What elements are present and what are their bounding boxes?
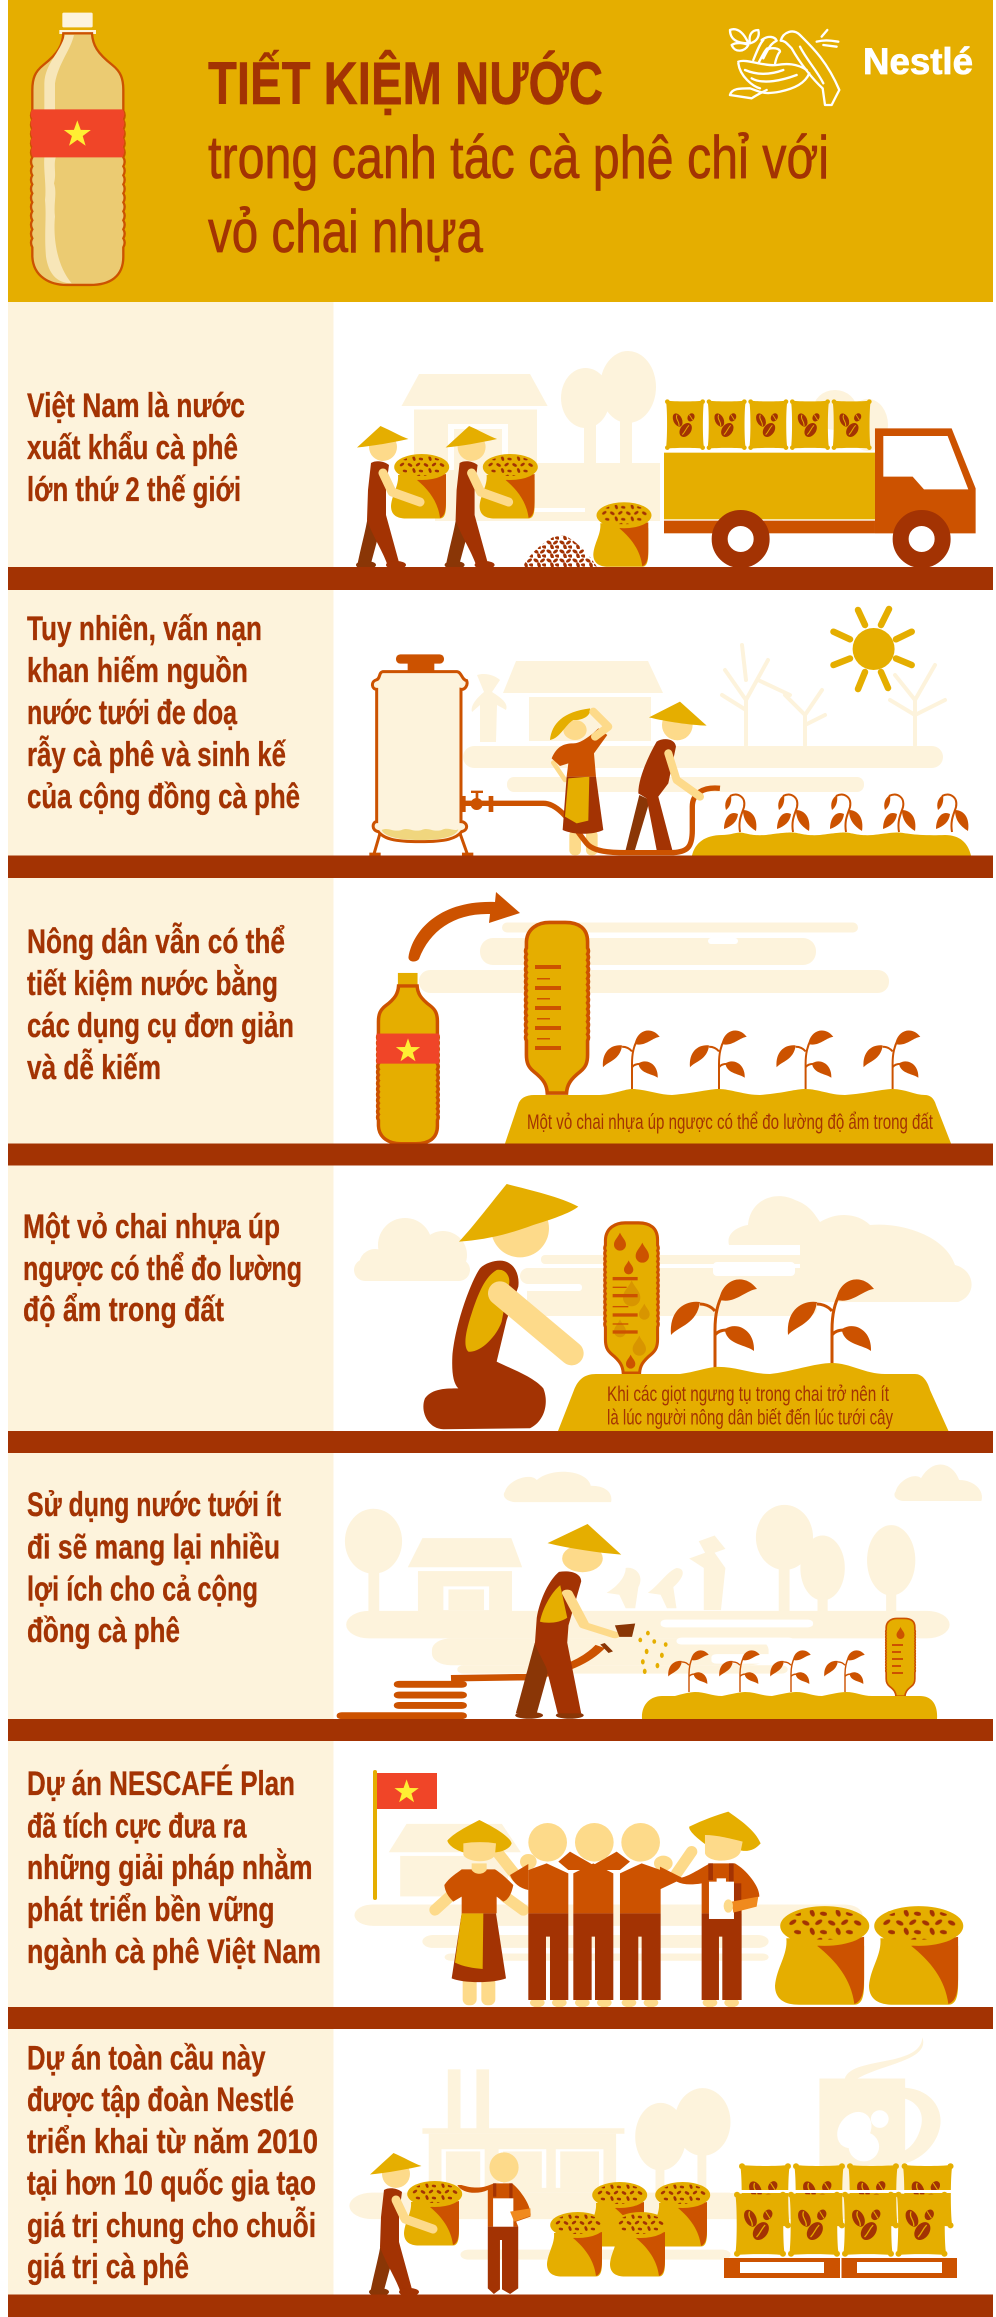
caption: when droplets fade: là lúc người nông dân biết đến lúc tưới cây — [607, 1406, 893, 1430]
text: section 5: lợi ích cho cả cộng — [27, 1570, 258, 1608]
text: section 5: đồng cà phê — [27, 1612, 180, 1650]
icon: sack 1 — [775, 1906, 869, 2005]
farmer carrying sack 2 — [445, 426, 538, 569]
background bars — [419, 922, 889, 993]
text: section 2: rẫy cà phê và sinh kế — [27, 736, 286, 774]
pallets with sacks — [724, 2163, 957, 2278]
panel: section 3, plastic bottle tool — [27, 892, 951, 1144]
text: section 5 — [27, 1486, 281, 1650]
farmer carrying sack — [369, 2153, 462, 2296]
mound with plants and bottle — [642, 1618, 937, 1719]
band 1 — [8, 567, 993, 590]
farmer — [515, 1524, 635, 1719]
text: section 7: tại hơn 10 quốc gia tạo — [27, 2164, 316, 2202]
farmer holding the hose — [626, 702, 707, 850]
panel: section 7, global project — [27, 2037, 957, 2296]
group of farmers and staff — [435, 1812, 761, 2007]
mound with plants — [505, 1030, 951, 1144]
icon: upright bottle — [377, 973, 439, 1144]
farmer carrying sack 1 — [356, 426, 449, 569]
text: section 7: Dự án toàn cầu này — [27, 2040, 266, 2078]
kneeling farmer — [423, 1184, 578, 1429]
band 4 — [8, 1431, 993, 1453]
text: section 6 — [27, 1765, 321, 1971]
text: section 1: Việt Nam là nước — [27, 387, 245, 425]
title: trong canh tác cà phê chỉ với — [208, 124, 829, 191]
icon: empty water tank and hose — [369, 654, 720, 856]
header panel — [8, 0, 993, 302]
Nestlé wordmark: Nestlé — [863, 41, 973, 82]
dry plants on mound — [692, 795, 971, 856]
band 6 — [8, 2007, 993, 2029]
band 3 — [8, 1144, 993, 1166]
text: section 4: độ ẩm trong đất — [23, 1291, 224, 1329]
text: section 2: nước tưới đe doạ — [27, 694, 238, 732]
truck with coffee sacks — [664, 399, 976, 560]
text: section 7: giá trị cà phê — [27, 2248, 189, 2286]
panel: section 1, coffee export — [27, 351, 976, 569]
right illustration column background — [334, 302, 993, 2317]
caption: when droplets fade — [607, 1383, 893, 1430]
text: section 7 — [27, 2040, 318, 2286]
text: section 5: đi sẽ mang lại nhiều — [27, 1528, 280, 1566]
text: section 7: được tập đoàn Nestlé — [27, 2081, 294, 2119]
scene: farmer watering, in stretched crop coordinates — [337, 1465, 982, 1719]
background village — [402, 351, 888, 521]
sacks pile — [547, 2182, 710, 2276]
man inspecting — [457, 2152, 531, 2294]
panel: section 6, NESCAFÉ Plan — [27, 1765, 963, 2007]
band 2 — [8, 856, 993, 878]
mound with plants — [558, 1279, 948, 1431]
arms behind — [498, 1852, 692, 1877]
title: vỏ chai nhựa — [208, 198, 483, 265]
icon: plastic bottle with flag label — [31, 13, 125, 285]
caption: when droplets fade: Khi các giọt ngưng tụ trong chai trở nên ít — [607, 1383, 889, 1406]
text: section 3: Nông dân vẫn có thể — [27, 923, 285, 961]
water spray — [638, 1631, 668, 1674]
icon: sun — [834, 609, 912, 689]
icon: Nestlé nest logo — [730, 29, 839, 105]
text: section 7: giá trị chung cho chuỗi — [27, 2207, 316, 2245]
hose coil — [337, 1646, 600, 1719]
background clouds and bars — [354, 1196, 972, 1316]
text: section 7: triển khai từ năm 2010 — [27, 2123, 318, 2161]
text: section 2: Tuy nhiên, vấn nạn — [27, 610, 262, 648]
text: section 5: Sử dụng nước tưới ít — [27, 1486, 281, 1524]
man with clipboard — [677, 1812, 761, 2007]
band 5 — [8, 1719, 993, 1741]
text: section 4: ngược có thể đo lường — [23, 1250, 302, 1288]
title — [208, 50, 829, 265]
text: section 4 — [23, 1208, 302, 1329]
text: section 2: khan hiếm nguồn — [27, 652, 248, 690]
background factory, trees and mug — [349, 2037, 941, 2260]
woman shading her eyes — [550, 708, 608, 834]
icon: sack on ground — [593, 502, 652, 567]
text: section 6: đã tích cực đưa ra — [27, 1808, 247, 1846]
text: section 1: lớn thứ 2 thế giới — [27, 471, 241, 509]
text: section 3: các dụng cụ đơn giản — [27, 1007, 294, 1045]
icon: sack 2 — [869, 1906, 963, 2005]
panel: section 4, measuring moisture — [23, 1184, 972, 1431]
left text column background — [8, 302, 334, 2317]
text: section 6: ngành cà phê Việt Nam — [27, 1933, 321, 1971]
icon: inverted bottle with droplets — [605, 1223, 658, 1373]
icon: inverted bottle with ticks — [526, 922, 588, 1093]
background dry village — [463, 645, 945, 792]
text: section 4: Một vỏ chai nhựa úp — [23, 1208, 280, 1246]
text: section 3: và dễ kiếm — [27, 1049, 161, 1087]
text: section 6: phát triển bền vững — [27, 1891, 274, 1929]
background village — [345, 1465, 982, 1674]
background village — [354, 1824, 863, 1961]
text: section 1 — [27, 387, 245, 509]
three men — [510, 1823, 683, 2007]
text: section 3: tiết kiệm nước bằng — [27, 965, 278, 1003]
text: section 6: những giải pháp nhằm — [27, 1849, 312, 1887]
text: section 2 — [27, 610, 300, 816]
text: section 3 — [27, 923, 294, 1087]
panel: section 2, water scarcity — [27, 609, 971, 856]
band 7 — [8, 2294, 993, 2317]
text: section 6: Dự án NESCAFÉ Plan — [27, 1765, 295, 1803]
title: TIẾT KIỆM NƯỚC — [208, 50, 603, 117]
arrow — [408, 892, 520, 961]
text: section 2: của cộng đồng cà phê — [27, 778, 300, 816]
flag — [373, 1770, 437, 1900]
panel: section 5, watering — [27, 1465, 982, 1719]
woman — [435, 1820, 523, 2005]
icon: coffee bean pile — [523, 535, 597, 567]
text: section 1: xuất khẩu cà phê — [27, 429, 238, 467]
